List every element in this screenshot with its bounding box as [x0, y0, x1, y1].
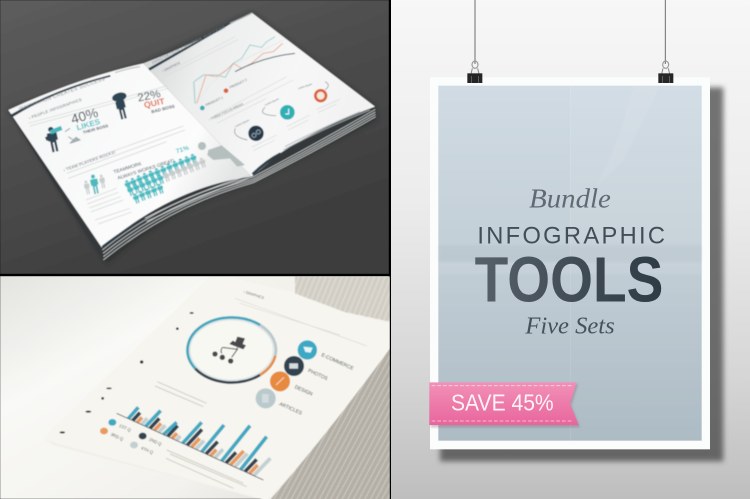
right page footer band — [252, 110, 370, 175]
stat: 22% quit: QUIT — [143, 96, 166, 110]
line chart — [193, 37, 283, 104]
stat: 22% quit: BAD BOSS — [151, 104, 175, 114]
stat: 40% likes: THEIR BOSS — [82, 123, 109, 135]
bar chart legend: 1ST Q — [118, 423, 132, 433]
poster shadow — [440, 87, 723, 461]
newspaper text top — [295, 277, 390, 322]
teamwork caption: TEAMWORK — [113, 161, 143, 176]
bar chart baseline — [117, 413, 263, 480]
category: photos — [284, 356, 329, 382]
category: articles: ARTICLES — [278, 401, 303, 417]
icon: large grey figure at spine — [198, 142, 245, 167]
category: e-commerce — [298, 340, 355, 372]
chart legend: PRODUCT 1 — [205, 95, 224, 107]
left page header band: INNOVATION CREATES SUCCESS — [18, 76, 106, 113]
section heading: team players — [63, 126, 185, 178]
bar chart — [128, 407, 270, 476]
panel: printed page on newspaper — [0, 276, 390, 499]
icon: right binder clip — [658, 61, 673, 83]
icon: navy focus circle: Lorem Ipsum — [234, 118, 250, 128]
stat: 40% likes: LIKES — [76, 117, 102, 132]
left page — [8, 63, 252, 247]
section heading: graphics: › GRAPHICS — [162, 60, 181, 73]
right page header band: INNOVATION CREATES SUCCESS — [151, 24, 226, 65]
person with teal speech tag — [45, 126, 80, 153]
icon: team of three — [83, 174, 106, 195]
donut chart — [187, 317, 276, 383]
category: design — [270, 371, 314, 398]
stat: 40% likes — [69, 105, 109, 135]
fold shading — [438, 77, 702, 449]
icon: navy focus circle — [234, 118, 277, 151]
icon: orange focus ring — [298, 82, 340, 113]
teamwork caption: 71% — [175, 145, 190, 155]
left page header band — [10, 67, 168, 126]
body copy — [155, 382, 247, 488]
title: TOOLS: TOOLS — [475, 244, 663, 316]
bar chart legend: 3RD Q — [110, 432, 125, 442]
bar chart legend: 4TH Q — [140, 445, 155, 455]
booklet spread — [8, 13, 377, 263]
section heading: graphics: › GRAPHICS — [243, 290, 265, 300]
section heading: three focus areas — [208, 77, 293, 123]
teamwork caption — [113, 145, 190, 182]
poster printed area — [438, 86, 702, 441]
poster sheet — [430, 77, 710, 449]
panel: booklet mockup on dark surface — [0, 0, 389, 274]
icon: left binder clip — [467, 61, 482, 83]
icon: orange focus ring: Lorem Ipsum — [298, 83, 313, 90]
left page footer band — [102, 175, 250, 249]
icon: org chart person — [212, 337, 246, 364]
section heading: people infographics: › PEOPLE INFOGRAPHICS — [28, 97, 82, 120]
ribbon: save 45% — [429, 382, 580, 427]
category: articles — [256, 388, 303, 417]
script: Bundle: Bundle — [529, 183, 611, 213]
team caption lines — [86, 188, 132, 224]
stat: 22% quit — [136, 88, 175, 114]
teamwork caption: ALWAYS WORKS GREAT! — [117, 158, 175, 182]
category: photos: PHOTOS — [307, 368, 329, 382]
stat: 22% quit: 22% — [136, 88, 162, 105]
category: e-commerce: E-COMMERCE — [320, 352, 355, 372]
newspaper text right — [270, 348, 390, 499]
bar chart legend: 2ND Q — [148, 437, 163, 447]
panel: hanging poster — [391, 0, 750, 499]
section heading: team players: › TEAM PLAYERS ROCKS! — [63, 149, 116, 173]
title: INFOGRAPHIC: INFOGRAPHIC — [477, 223, 665, 249]
category: design: DESIGN — [294, 384, 314, 398]
icon: teal focus circle: Lorem Ipsum — [264, 97, 279, 107]
curved rule under chart — [235, 53, 295, 72]
person with dark speech bubble — [111, 91, 128, 120]
people grid: 71 percent teal — [124, 153, 207, 204]
bar chart legend — [100, 419, 163, 455]
right page header band — [148, 13, 252, 77]
printed infographic page — [43, 277, 390, 499]
script: Five Sets: Five Sets — [524, 313, 615, 339]
chart legend — [200, 78, 248, 110]
stat: 40% likes: 40% — [69, 105, 100, 127]
right page — [143, 13, 375, 177]
page stack edge — [8, 100, 376, 262]
icon: teal focus circle — [262, 97, 310, 130]
binder hole marks — [60, 312, 194, 433]
hanging wires — [475, 0, 665, 64]
newspaper sheet — [43, 277, 390, 499]
chart legend: PRODUCT 2 — [229, 78, 248, 90]
section heading: graphics — [235, 290, 367, 346]
ribbon: save 45%: SAVE 45% — [451, 390, 554, 416]
section heading: three focus areas: › THREE FOCUS AREAS — [208, 102, 244, 122]
